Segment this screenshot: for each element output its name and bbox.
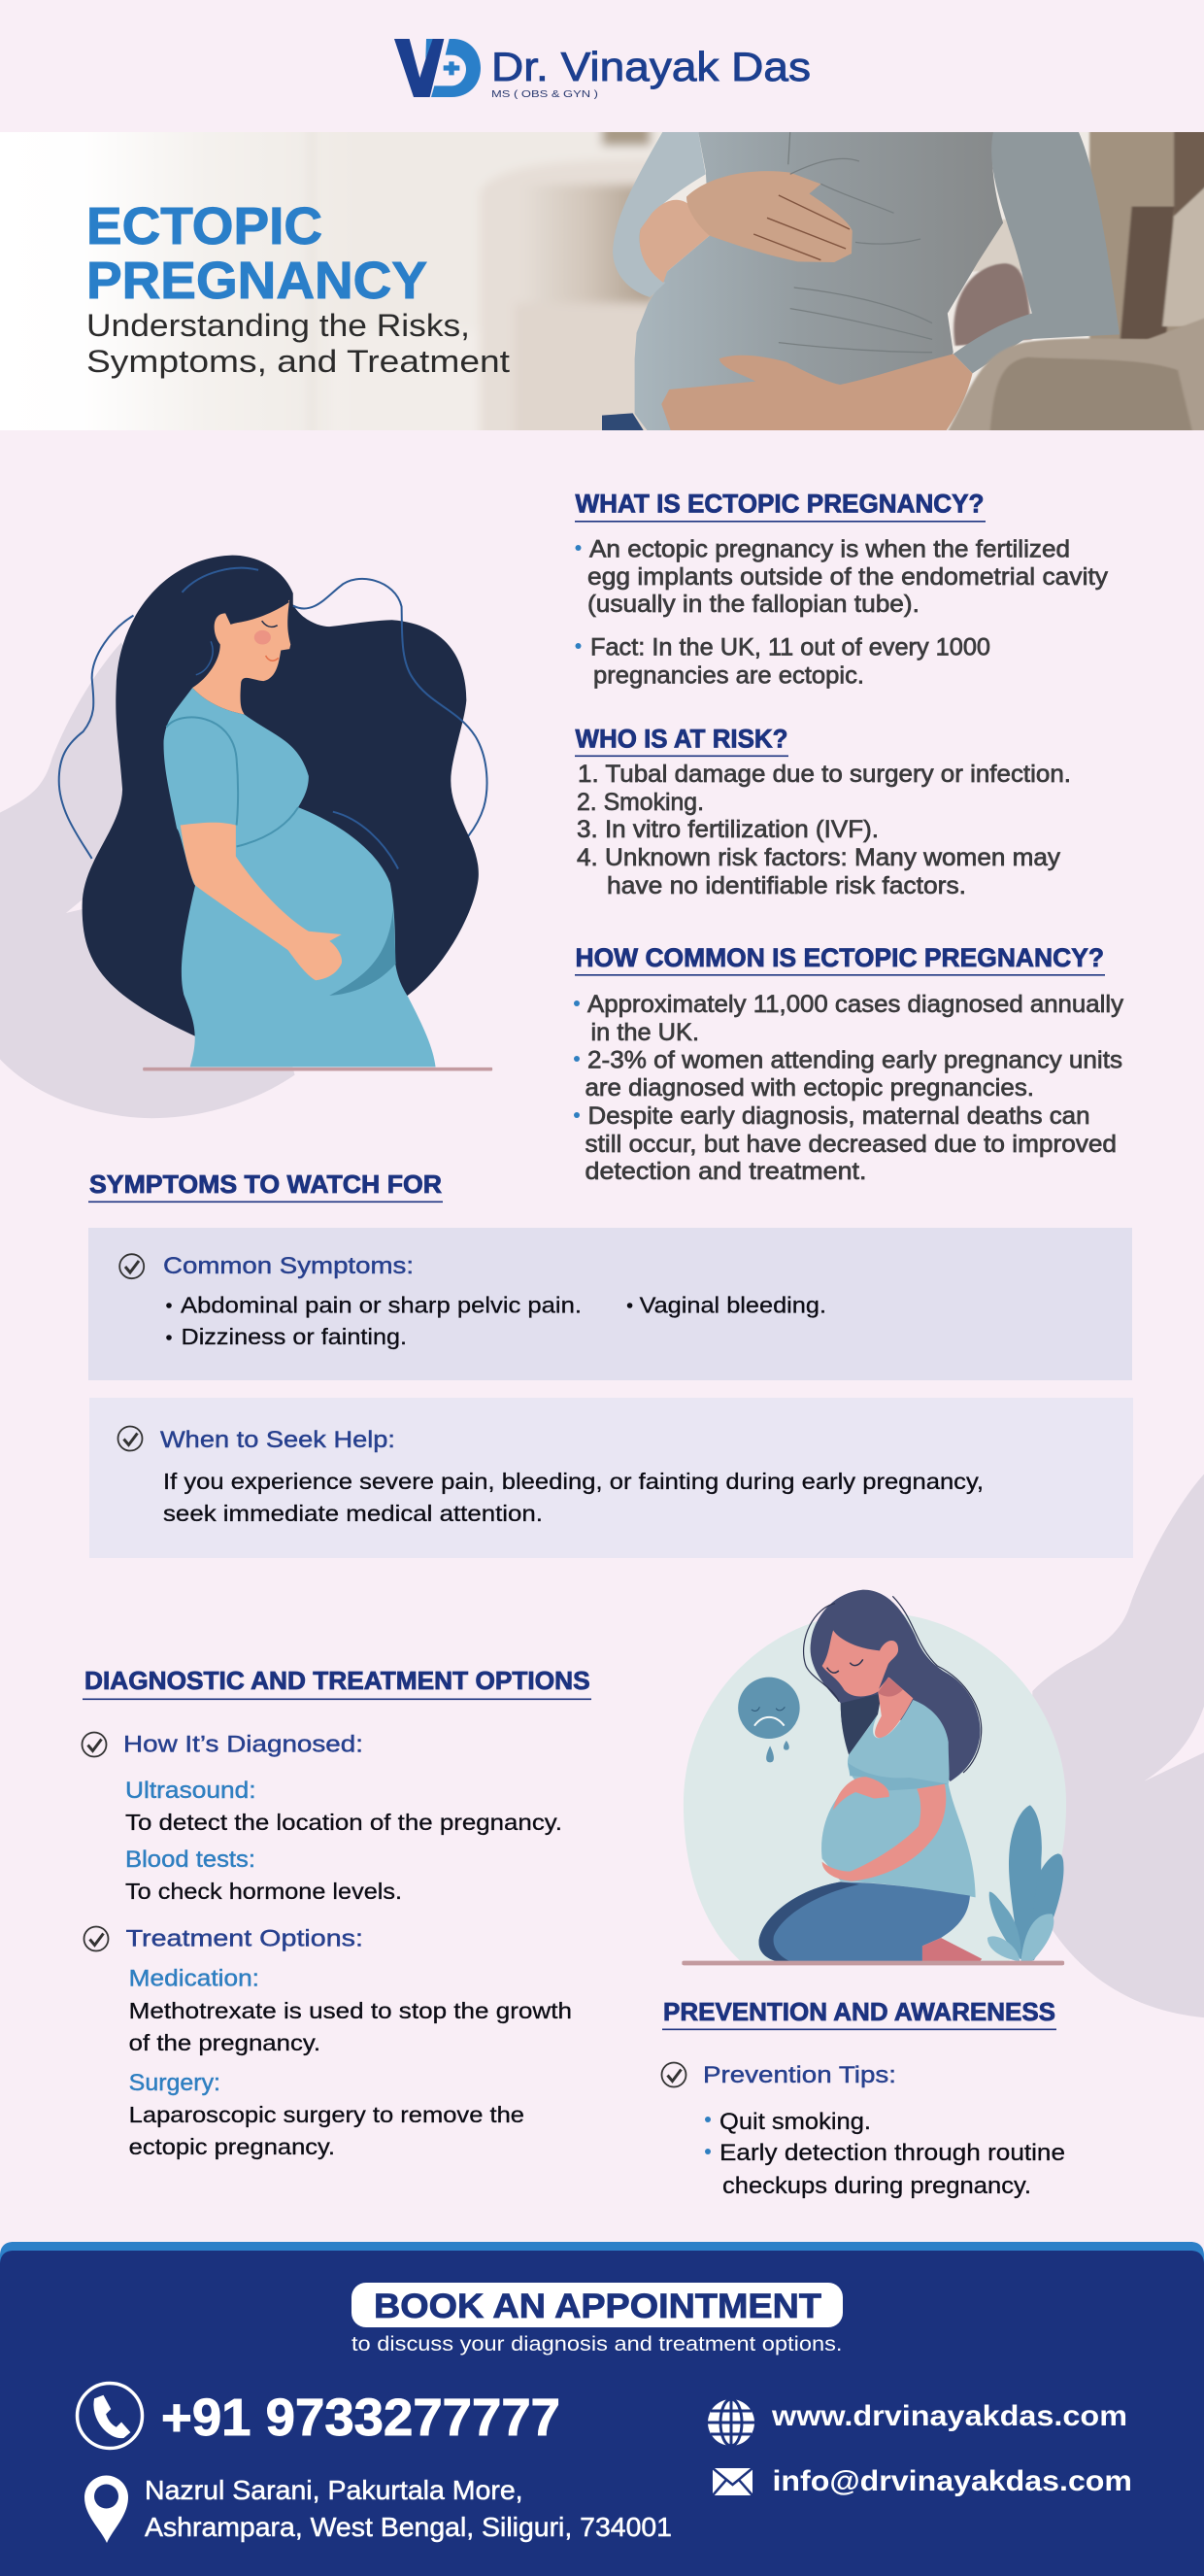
illustration: pregnant woman with long hair [59,556,492,1070]
header logo [394,39,811,100]
neck [875,1678,913,1738]
icon: check [662,2063,686,2086]
inner hair shadow [841,1693,882,1755]
statistics bullets: still occur, but have decreased due to improved [585,1131,1117,1158]
address: Ashrampara, West Bengal, Siliguri, 734001 [145,2512,672,2542]
statistics bullets: Despite early diagnosis, maternal deaths can [588,1102,1089,1130]
dress [164,688,436,1067]
section: diagnostic and treatment options [82,1668,591,2159]
hero title: ECTOPIC [86,197,322,255]
diagnosis methods [125,1778,562,1904]
address: Nazrul Sarani, Pakurtala More, [145,2475,523,2505]
phone number: +91 9733277777 [161,2389,560,2447]
shirt [821,1700,976,1897]
doctor qualification: MS ( OBS & GYN ) [491,89,598,100]
hair outlines [804,1596,982,1773]
subheading: treatment options: Treatment Options: [126,1926,363,1952]
background blob: right [1029,1474,1204,2017]
diagnosis methods: To check hormone levels. [125,1879,402,1904]
heading: WHO IS AT RISK? [575,725,788,754]
statistics bullets: Approximately 11,000 cases diagnosed annually [587,991,1124,1018]
hero photo: sofa [169,132,1089,430]
floor line [143,1068,492,1070]
statistics bullets: in the UK. [590,1019,699,1046]
hero title: PREGNANCY [86,252,427,310]
panel heading: When to Seek Help: [160,1427,395,1453]
treatment methods: ectopic pregnancy. [129,2134,335,2159]
icon: check [119,1254,144,1278]
shirt fold [848,1763,949,1790]
subheading: prevention tips: Prevention Tips: [703,2062,896,2088]
section: how common [574,943,1124,1185]
footer [0,2242,1204,2576]
icon: envelope [713,2468,752,2495]
symptom list: Dizziness or fainting. [181,1324,407,1349]
section: who is at risk [575,725,1071,899]
arm and hands [822,1777,946,1881]
booking note: to discuss your diagnosis and treatment options. [351,2333,843,2356]
prevention list [705,2109,1065,2199]
hero subtitle: Understanding the Risks, [86,308,470,343]
icon: sad face with tears [738,1678,800,1762]
treatment methods: Surgery: [129,2070,220,2096]
hero title [89,206,427,299]
symptom list [166,1293,826,1349]
definition bullets: pregnancies are ectopic. [593,662,864,690]
advice text [163,1469,984,1526]
hero banner [0,132,1204,430]
hair highlights [182,568,475,868]
icon: check [84,1927,109,1950]
icon: map pin [84,2475,128,2543]
heading: symptoms to watch for: SYMPTOMS TO WATCH FOR [89,1169,442,1199]
diagnosis methods: Blood tests: [125,1847,255,1873]
definition bullets: Fact: In the UK, 11 out of every 1000 [590,633,990,661]
hero photo: front cushion [946,317,1204,435]
trousers [759,1881,970,1961]
loose hair strands [59,616,487,859]
heading: WHAT IS ECTOPIC PREGNANCY? [575,490,985,519]
facial features [232,601,288,661]
risk list: 4. Unknown risk factors: Many women may [577,844,1061,871]
plant [987,1805,1063,1961]
symptom list: Abdominal pain or sharp pelvic pain. [181,1293,582,1318]
risk list: 2. Smoking. [577,789,704,816]
subheading: how it's diagnosed: How It’s Diagnosed: [123,1732,363,1758]
hero subtitle: Symptoms, and Treatment [86,344,510,379]
risk list: have no identifiable risk factors. [607,872,966,899]
hair [83,556,479,1043]
hero photo: pregnant woman [602,130,1120,431]
dress seams [166,717,298,847]
prevention list: Early detection through routine [719,2140,1065,2166]
heading: HOW COMMON IS ECTOPIC PREGNANCY? [575,943,1104,972]
panel: common symptoms [88,1228,1132,1380]
diagnosis methods: Ultrasound: [125,1778,256,1804]
risk list: 3. In vitro fertilization (IVF). [577,816,879,843]
address [145,2475,672,2542]
email: info@drvinayakdas.com [773,2465,1132,2497]
risk list: 1. Tubal damage due to surgery or infection. [578,761,1071,788]
prevention list: checkups during pregnancy. [722,2173,1031,2199]
heading: DIAGNOSTIC AND TREATMENT OPTIONS [84,1668,590,1695]
backdrop circle [684,1612,1066,1962]
face and neck [192,600,290,715]
definition bullets [575,536,1109,690]
definition bullets: An ectopic pregnancy is when the fertilized [589,536,1070,563]
icon: phone [78,2384,142,2448]
risk list [577,761,1071,899]
hero subtitle [86,308,510,379]
prevention list: Quit smoking. [719,2109,871,2135]
treatment methods [129,1966,572,2159]
button: book an appointment: BOOK AN APPOINTMENT [374,2288,821,2325]
hero photo: back cushions [953,127,1204,354]
illustration: kneeling sad pregnant woman [682,1590,1066,1965]
advice text: If you experience severe pain, bleeding, or fainting during early pregnancy, [163,1469,984,1494]
website: www.drvinayakdas.com [771,2400,1127,2432]
icon: check [82,1733,107,1756]
icon: check [118,1426,142,1451]
section: what is ectopic pregnancy [575,490,1109,690]
symptom list: Vaginal bleeding. [640,1293,826,1318]
definition bullets: (usually in the fallopian tube). [587,591,920,618]
statistics bullets: detection and treatment. [585,1158,866,1185]
treatment methods: Medication: [129,1966,259,1992]
footer accent band [0,2242,1204,2273]
icon: globe [708,2399,754,2446]
closed eyes [827,1659,863,1673]
background blob: left [0,642,295,1118]
advice text: seek immediate medical attention. [163,1501,543,1526]
panel: when to seek help [89,1398,1133,1558]
foot [922,1938,982,1961]
trouser shadow [759,1881,859,1961]
footer panel [0,2251,1204,2576]
treatment methods: of the pregnancy. [129,2030,320,2055]
neck shadow [878,1678,903,1697]
face [822,1630,898,1696]
belly shadow [329,910,396,996]
doctor name: Dr. Vinayak Das [491,44,811,89]
statistics bullets: 2-3% of women attending early pregnancy units [587,1047,1122,1074]
panel heading: Common Symptoms: [163,1253,414,1279]
heading: PREVENTION AND AWARENESS [663,1997,1055,2026]
section: prevention and awareness [662,1997,1065,2199]
definition bullets: egg implants outside of the endometrial cavity [587,563,1109,591]
statistics bullets [574,991,1124,1185]
statistics bullets: are diagnosed with ectopic pregnancies. [585,1074,1034,1102]
logo mark [394,39,481,97]
diagnosis methods: To detect the location of the pregnancy. [125,1810,562,1835]
hair [811,1590,981,1781]
treatment methods: Methotrexate is used to stop the growth [129,1998,572,2023]
hero white fade [0,132,216,430]
arm and hand [181,823,342,980]
floor line [682,1961,1064,1965]
treatment methods: Laparoscopic surgery to remove the [129,2102,524,2127]
